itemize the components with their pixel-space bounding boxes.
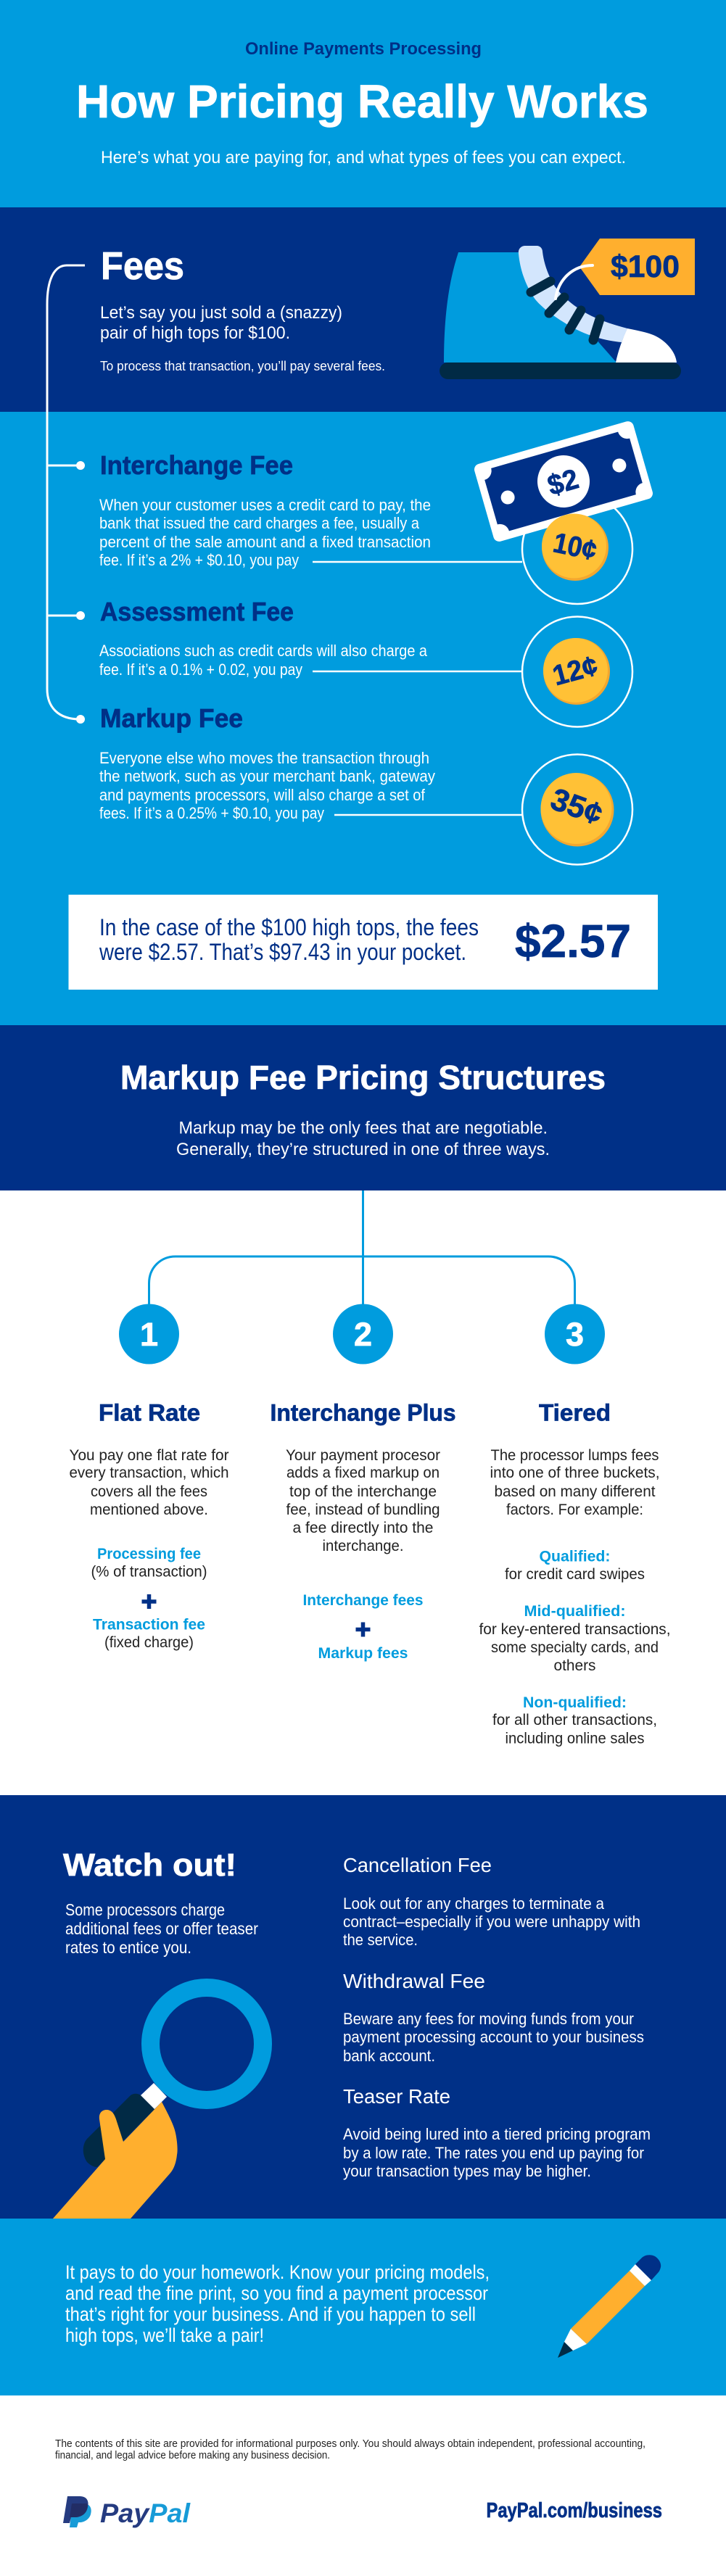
item: withdrawal fee: bank account. <box>343 2047 435 2065</box>
heading: interchange plus: Interchange Plus <box>270 1399 455 1425</box>
number badge 1 <box>119 1304 179 1364</box>
text: interchange plus description: fee, instead of bundling <box>286 1502 440 1518</box>
formula: processing fee plus transaction fee: Transaction fee <box>93 1617 205 1633</box>
callout: total fees: were $2.57. That’s $97.43 in your pocket. <box>99 939 466 965</box>
heading: assessment fee: Assessment Fee <box>100 597 294 626</box>
text: tiered description: The processor lumps fees <box>490 1447 659 1464</box>
text: interchange fee: fee. If it’s a 2% + $0.10, you pay <box>99 551 299 569</box>
text: interchange fee: percent of the sale amount and a fixed transaction <box>99 533 431 551</box>
tier: mid-qualified: Mid-qualified: <box>524 1603 625 1620</box>
text: fees intro: Let’s say you just sold a (snazzy) <box>100 303 342 323</box>
tier: mid-qualified: others <box>554 1657 596 1674</box>
heading: watch out: Watch out! <box>63 1847 236 1883</box>
icon: hand holding magnifying glass <box>53 1988 263 2219</box>
tier: mid-qualified: some specialty cards, and <box>491 1639 659 1656</box>
text: flat rate description: covers all the fees <box>91 1483 207 1500</box>
item: teaser rate <box>343 2085 651 2180</box>
icon: pencil <box>558 2255 661 2358</box>
item: withdrawal fee: Withdrawal Fee <box>343 1970 485 1992</box>
text: interchange plus description: a fee directly into the <box>293 1520 434 1536</box>
text: disclaimer: The contents of this site are provided for informational purposes only. You should always obtain independent, professional accounting, <box>55 2438 645 2450</box>
text: assessment fee: fee. If it’s a 0.1% + 0.02, you pay <box>99 660 302 679</box>
text: closing advice: high tops, we’ll take a pair! <box>65 2324 264 2346</box>
tree connector <box>149 1190 574 1305</box>
tier: qualified: for credit card swipes <box>505 1566 645 1583</box>
text: interchange plus description: interchange. <box>322 1538 403 1554</box>
item: cancellation fee: Look out for any charges to terminate a <box>343 1894 605 1913</box>
connector and ring: 35 cents <box>334 754 632 864</box>
panel: closing advice <box>0 2219 726 2395</box>
heading: tiered: Tiered <box>539 1399 611 1425</box>
text: closing advice <box>65 2261 490 2346</box>
text: fees intro <box>100 303 385 373</box>
icon: two dollar bill <box>473 420 654 543</box>
heading: flat rate: Flat Rate <box>99 1399 200 1425</box>
text: interchange plus description: adds a fixed markup on <box>286 1465 440 1481</box>
formula: processing fee plus transaction fee: (% of transaction) <box>91 1563 207 1581</box>
icon: coin 10 cents: 10¢ <box>550 527 600 567</box>
callout: total fees <box>68 895 658 990</box>
item: teaser rate: by a low rate. The rates you end up paying for <box>343 2144 644 2162</box>
callout: total fees: $2.57 <box>515 915 631 967</box>
tier: mid-qualified <box>479 1603 670 1674</box>
connector and ring: 10 cents <box>313 494 632 604</box>
number badge 1: 1 <box>140 1316 158 1353</box>
text: markup intro <box>176 1118 550 1159</box>
text: disclaimer <box>55 2438 645 2461</box>
item: teaser rate: Teaser Rate <box>343 2085 450 2108</box>
formula: interchange fees plus markup fees <box>303 1592 424 1662</box>
item: withdrawal fee <box>343 1970 644 2065</box>
text: markup fee: and payments processors, will also charge a set of <box>99 786 426 804</box>
text: flat rate description: mentioned above. <box>90 1502 208 1518</box>
text: markup fee <box>99 749 435 822</box>
text: disclaimer: financial, and legal advice before making any business decision. <box>55 2450 330 2461</box>
text: assessment fee: Associations such as credit cards will also charge a <box>99 642 428 660</box>
bracket connector <box>47 265 85 722</box>
number badge 3: 3 <box>566 1316 584 1353</box>
text: flat rate description: You pay one flat rate for <box>70 1447 229 1464</box>
tier: mid-qualified: for key-entered transactions, <box>479 1621 670 1638</box>
text: markup fee: fees. If it’s a 0.25% + $0.10, you pay <box>99 804 324 822</box>
formula: interchange fees plus markup fees: Markup fees <box>318 1645 408 1662</box>
text: watch out intro: rates to entice you. <box>65 1938 191 1957</box>
item: withdrawal fee: Beware any fees for moving funds from your <box>343 2010 634 2028</box>
tier: qualified: Qualified: <box>540 1549 611 1565</box>
tier: non-qualified <box>492 1694 657 1747</box>
text: interchange plus description: top of the interchange <box>289 1483 437 1500</box>
column: interchange plus <box>270 1304 455 1662</box>
panel: watch out <box>0 1795 726 2219</box>
text: interchange fee: bank that issued the card charges a fee, usually a <box>99 514 420 532</box>
text: tiered description <box>490 1447 660 1518</box>
connector and ring: 12 cents <box>313 616 632 726</box>
item: cancellation fee: the service. <box>343 1931 418 1949</box>
title: How Pricing Really Works <box>76 75 648 128</box>
eyebrow heading: Online Payments Processing <box>245 39 482 59</box>
text: tiered description: into one of three buckets, <box>490 1465 660 1481</box>
text: assessment fee <box>99 642 428 679</box>
heading: fees: Fees <box>101 244 184 288</box>
text: closing advice: It pays to do your homework. Know your pricing models, <box>65 2261 490 2283</box>
text: closing advice: that’s right for your business. And if you happen to sell <box>65 2303 476 2325</box>
logo: PayPal: PayPal <box>100 2498 191 2528</box>
text: fees intro: pair of high tops for $100. <box>100 323 290 343</box>
text: watch out intro: Some processors charge <box>65 1900 225 1919</box>
text: watch out intro: additional fees or offer teaser <box>65 1919 258 1938</box>
text: tiered description: based on many different <box>495 1483 656 1500</box>
icon: coin 35 cents: 35¢ <box>546 782 607 832</box>
logo: PayPal <box>63 2496 191 2528</box>
text: markup intro: Generally, they’re structured in one of three ways. <box>176 1140 550 1159</box>
number badge 2: 2 <box>354 1316 372 1353</box>
text: interchange plus description: Your payment procesor <box>286 1447 440 1464</box>
text: interchange fee: When your customer uses a credit card to pay, the <box>99 496 431 514</box>
text: website link: PayPal.com/business <box>486 2499 662 2522</box>
heading: markup fee pricing structures: Markup Fee Pricing Structures <box>120 1059 606 1096</box>
text: interchange plus description <box>286 1447 440 1554</box>
panel: fees intro <box>0 207 726 412</box>
item: teaser rate: your transaction types may be higher. <box>343 2162 591 2180</box>
heading: markup fee: Markup Fee <box>100 703 243 733</box>
item: cancellation fee: contract–especially if you were unhappy with <box>343 1913 640 1931</box>
formula: processing fee plus transaction fee <box>91 1546 207 1651</box>
text: markup intro: Markup may be the only fees that are negotiable. <box>178 1118 548 1138</box>
item: teaser rate: Avoid being lured into a tiered pricing program <box>343 2125 651 2143</box>
text: closing advice: and read the fine print, so you find a payment processor <box>65 2282 488 2304</box>
text: fees intro: To process that transaction, you’ll pay several fees. <box>100 359 385 373</box>
icon: two dollar bill: $2 <box>544 463 582 502</box>
number badge 3 <box>545 1304 605 1364</box>
number badge 2 <box>333 1304 393 1364</box>
column: tiered <box>479 1304 670 1747</box>
panel: fee breakdown <box>0 265 726 1025</box>
text: markup fee: Everyone else who moves the transaction through <box>99 749 429 767</box>
formula: processing fee plus transaction fee: Processing fee <box>97 1546 201 1562</box>
formula: processing fee plus transaction fee: (fixed charge) <box>104 1634 194 1651</box>
icon: coin 12 cents <box>543 638 610 705</box>
column: flat rate <box>70 1304 229 1651</box>
icon: coin 12 cents: 12¢ <box>550 650 601 692</box>
tier: non-qualified: for all other transactions, <box>492 1712 657 1728</box>
item: cancellation fee: Cancellation Fee <box>343 1854 492 1876</box>
text: markup fee: the network, such as your merchant bank, gateway <box>99 767 435 785</box>
panel: pricing structures <box>0 1190 726 1795</box>
icon: high top sneaker with price tag <box>440 239 695 379</box>
icon: PayPal double-P mark <box>63 2496 91 2527</box>
callout: total fees: In the case of the $100 high tops, the fees <box>99 914 479 940</box>
heading: interchange fee: Interchange Fee <box>100 450 293 480</box>
tier: non-qualified: Non-qualified: <box>523 1694 627 1711</box>
icon: coin 35 cents <box>541 773 614 847</box>
formula: interchange fees plus markup fees: Interchange fees <box>303 1592 424 1609</box>
text: watch out intro <box>65 1900 258 1957</box>
tier: qualified <box>505 1549 645 1583</box>
item: withdrawal fee: payment processing account to your business <box>343 2028 644 2046</box>
icon: high top sneaker with price tag: $100 <box>611 249 680 284</box>
text: flat rate description <box>70 1447 229 1518</box>
panel: header <box>0 0 726 207</box>
item: cancellation fee <box>343 1854 640 1949</box>
tier: non-qualified: including online sales <box>505 1730 644 1747</box>
text: tiered description: factors. For example: <box>506 1502 643 1518</box>
icon: coin 10 cents <box>542 513 609 581</box>
text: flat rate description: every transaction, which <box>70 1465 229 1481</box>
panel: markup fee heading <box>0 1025 726 1190</box>
subtitle: Here’s what you are paying for, and what types of fees you can expect. <box>101 148 626 167</box>
text: interchange fee <box>99 496 431 569</box>
